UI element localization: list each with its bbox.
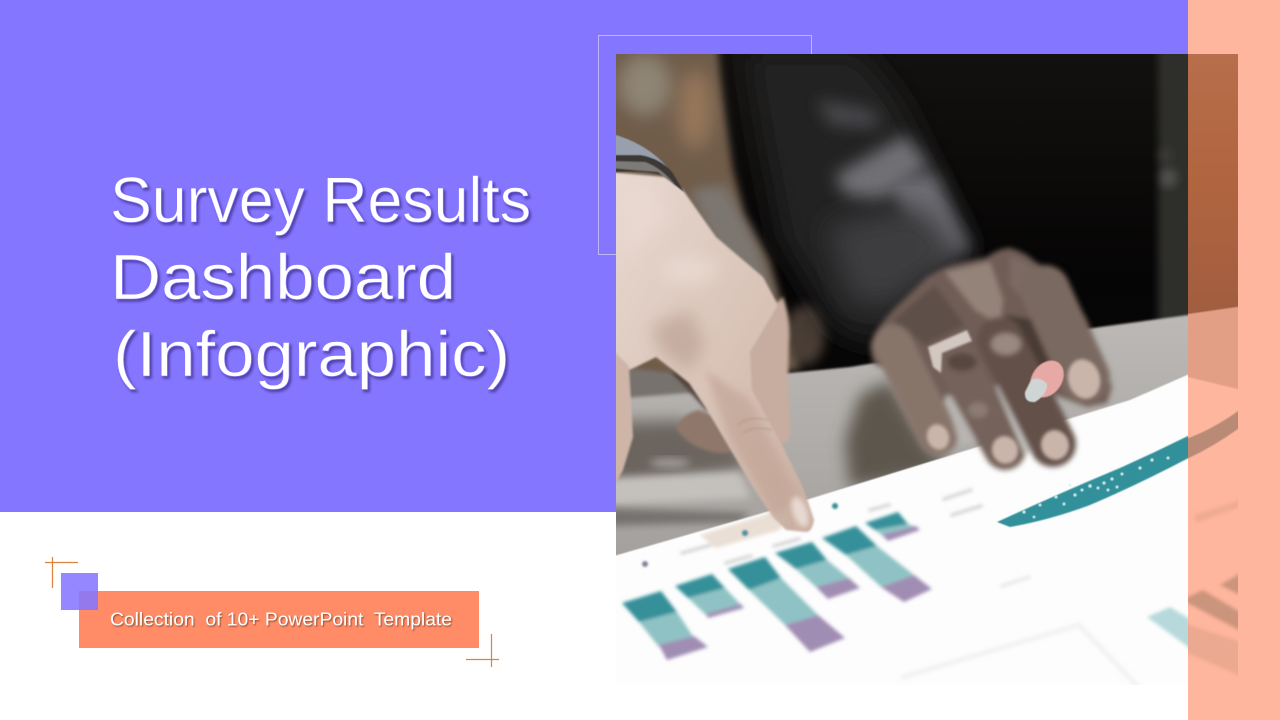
title bbox=[110, 164, 531, 390]
bright gap beside pinky bbox=[945, 395, 978, 445]
bright gap beside ring finger bbox=[995, 385, 1035, 455]
hand back and index finger bbox=[610, 172, 814, 532]
pinky bbox=[893, 345, 938, 435]
fingernails bbox=[923, 356, 1105, 468]
title: Dashboard bbox=[110, 241, 456, 313]
photo: hands pointing at printed charts bbox=[616, 54, 1188, 685]
outline frame behind photo bbox=[598, 36, 812, 254]
photo seen through the band bbox=[1180, 40, 1250, 680]
stacked bar chart on paper bbox=[622, 512, 932, 660]
bar 4 bbox=[775, 542, 860, 599]
photo backdrop bbox=[666, 54, 1165, 384]
teal swoosh with dots bbox=[997, 430, 1200, 527]
legend dots on paper bbox=[642, 503, 838, 567]
bar 3 bbox=[728, 557, 845, 652]
lit top of knuckles bbox=[945, 262, 1003, 325]
panel: translucent salmon strip over the photo bbox=[1180, 0, 1280, 720]
subtitle text: Collection of 10+ PowerPoint Template bbox=[110, 608, 452, 630]
hand back bbox=[870, 248, 1112, 407]
pale teal bar at lower right bbox=[1146, 606, 1188, 649]
table tinted bbox=[1180, 305, 1250, 392]
orange banner bbox=[79, 591, 479, 648]
watch strap at the wrist bbox=[610, 133, 684, 192]
table surface bbox=[616, 314, 1188, 556]
faint axis labels on paper bbox=[680, 488, 1140, 688]
teal swoosh tinted bbox=[1180, 402, 1250, 462]
ring on finger bbox=[928, 330, 972, 373]
left hand pointing bbox=[608, 133, 814, 532]
curled finger behind bbox=[674, 374, 730, 454]
decorative crosshair: bottom right bbox=[466, 634, 499, 667]
faint paper tint under finger bbox=[700, 512, 782, 549]
right hand bbox=[870, 248, 1112, 468]
decorative crosshair: top left bbox=[45, 557, 78, 588]
jacket edge at right bbox=[1154, 54, 1188, 320]
second knuckle finger bbox=[748, 296, 792, 444]
paper sheet bbox=[616, 374, 1188, 685]
salmon side band bbox=[1188, 0, 1280, 720]
blurred dark jacket bbox=[745, 50, 975, 345]
title: Survey Results bbox=[110, 164, 531, 236]
lower chart bars tinted bbox=[1180, 497, 1250, 680]
grey wedge between hand and table bbox=[628, 368, 692, 400]
dark photo area tinted bbox=[1180, 40, 1250, 320]
bar 5 bbox=[822, 526, 932, 602]
shadows on the table bbox=[600, 380, 960, 526]
pink and silver painted nail bbox=[1024, 360, 1064, 403]
bar 6 bbox=[865, 512, 920, 541]
bar 2 bbox=[675, 574, 744, 618]
bar 1 bbox=[622, 591, 708, 660]
thumb at the left edge bbox=[616, 352, 634, 482]
knuckle highlights bbox=[991, 333, 1021, 355]
title: (Infographic) bbox=[113, 318, 510, 390]
hand shading bbox=[620, 185, 812, 529]
subtitle banner bbox=[61, 573, 479, 648]
middle finger bbox=[1000, 340, 1053, 444]
panel: purple header block bbox=[0, 0, 1188, 512]
index finger bbox=[1045, 290, 1085, 378]
purple accent square bbox=[61, 573, 98, 610]
dark gap between fingers bbox=[1006, 314, 1051, 366]
ring finger bbox=[958, 365, 1005, 449]
blurred brown background at top left bbox=[616, 54, 830, 378]
